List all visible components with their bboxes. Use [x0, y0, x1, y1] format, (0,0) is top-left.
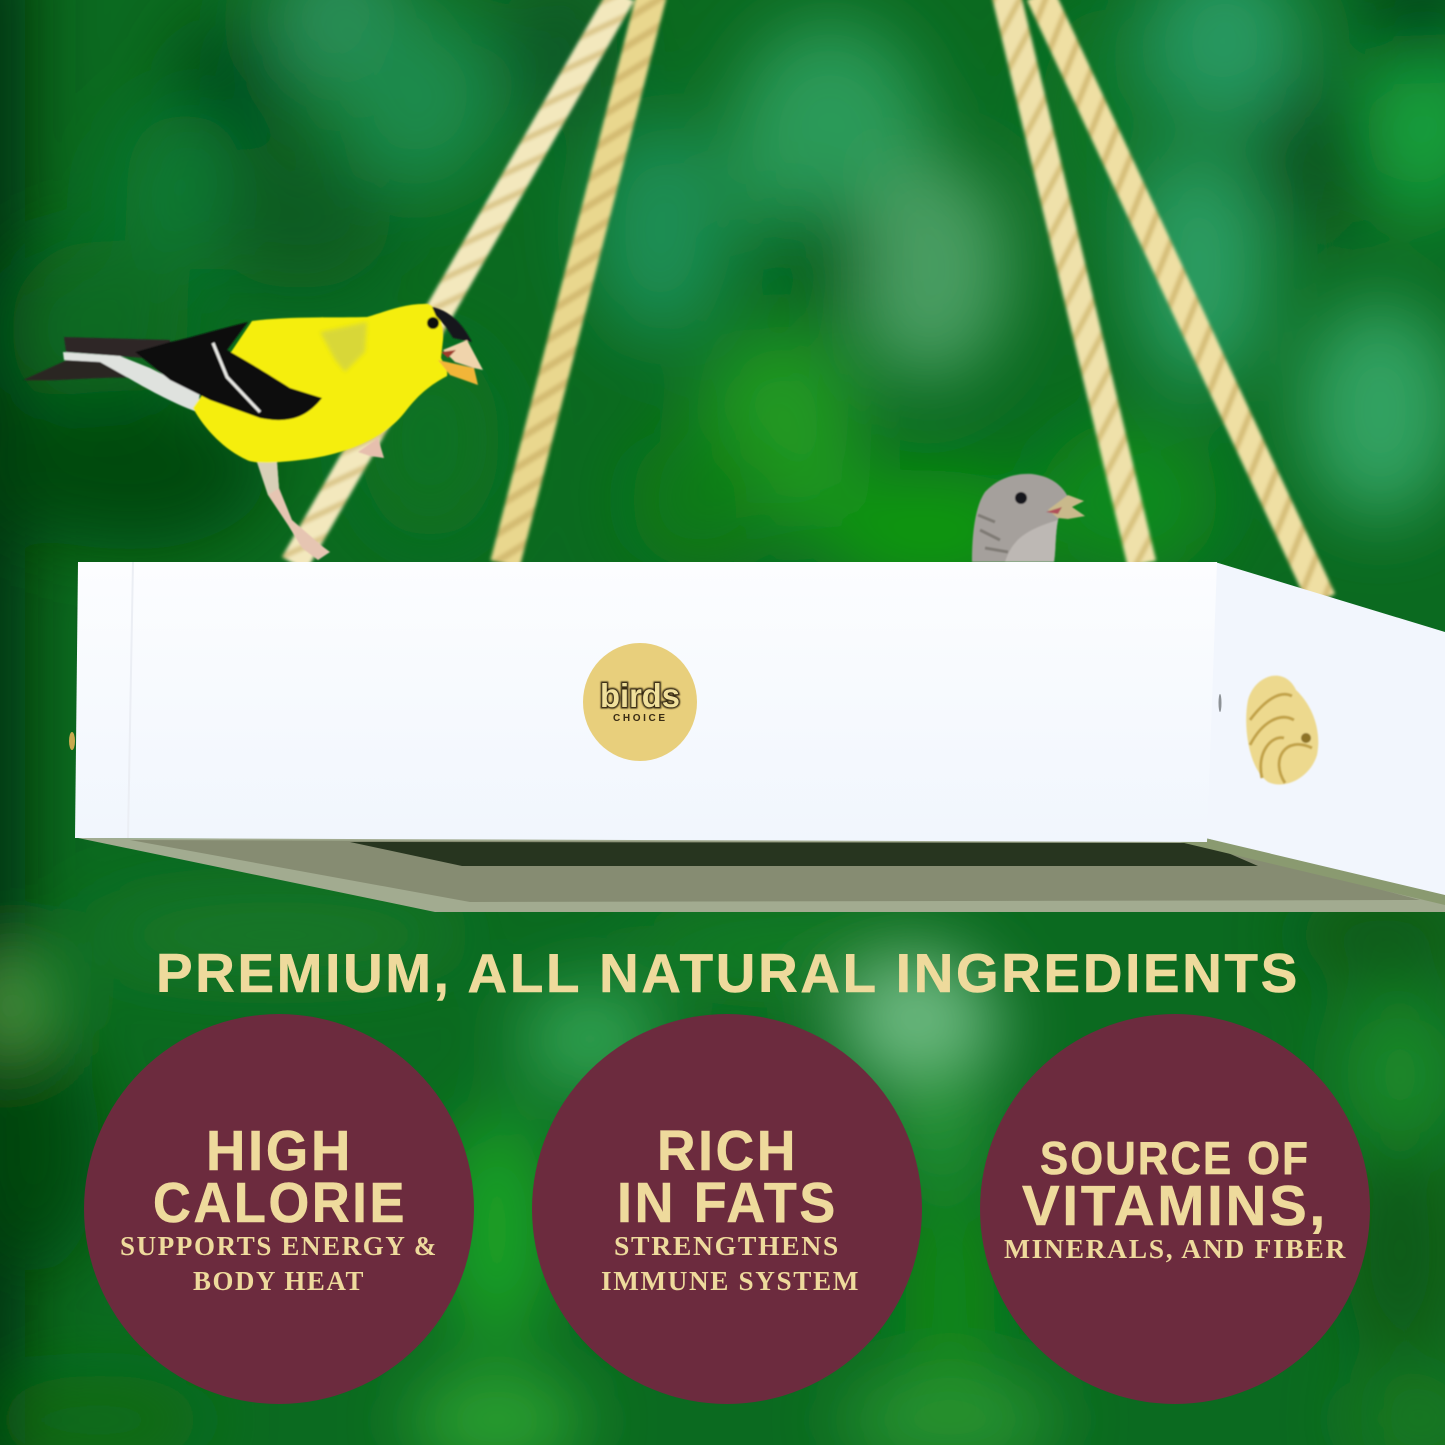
right face [1205, 562, 1445, 895]
birds choice badge: CHOICE [613, 713, 665, 724]
tail white edge [63, 352, 200, 412]
inner mesh [350, 842, 1258, 866]
eye [427, 317, 439, 329]
rope knot [1246, 676, 1318, 784]
birds choice badge: birds [600, 677, 680, 714]
lower beak [438, 360, 478, 385]
rope: far left [294, 0, 622, 564]
badge: source of vitamins [980, 1014, 1370, 1404]
cap [432, 307, 472, 342]
corner seam [128, 562, 133, 838]
rope: far right [1040, 0, 1322, 600]
body shade [320, 322, 367, 372]
badge: high calorie: CALORIE [153, 1171, 407, 1235]
badge: high calorie [84, 1014, 474, 1404]
badge: high calorie: BODY HEAT [193, 1266, 365, 1296]
front face [75, 562, 1217, 842]
badge: rich in fats [532, 1014, 922, 1404]
rope: inner right [1006, 0, 1142, 564]
badge: source of vitamins: SOURCE OF [1040, 1132, 1310, 1184]
ropes [294, 0, 1322, 600]
rope: inner left [505, 0, 652, 564]
heading: PREMIUM, ALL NATURAL INGREDIENTS [156, 942, 1300, 1004]
platform feeder [69, 562, 1445, 912]
badge: rich in fats: IN FATS [617, 1171, 838, 1235]
badge: source of vitamins: MINERALS, AND FIBER [1004, 1234, 1347, 1264]
upper beak [443, 340, 483, 370]
upper tail feathers [64, 337, 170, 360]
body [193, 304, 447, 463]
badge: rich in fats: IMMUNE SYSTEM [601, 1266, 860, 1296]
badge: high calorie: SUPPORTS ENERGY & [120, 1231, 438, 1261]
wing [135, 322, 322, 420]
birds choice badge: birds [600, 677, 680, 714]
badge: high calorie: HIGH [206, 1119, 353, 1183]
house finch [972, 474, 1085, 562]
wing bar [213, 343, 260, 412]
badge: rich in fats: STRENGTHENS [614, 1231, 840, 1261]
left rope nub [69, 732, 75, 750]
underside [78, 838, 1445, 912]
tail [23, 360, 135, 380]
screw [1218, 694, 1222, 712]
legs [257, 462, 330, 560]
underside inner panel [130, 840, 1420, 902]
badge: source of vitamins: VITAMINS, [1022, 1174, 1328, 1238]
badge: rich in fats: RICH [657, 1119, 798, 1183]
goldfinch [23, 304, 483, 560]
birds choice badge [583, 643, 697, 761]
right face rim [1180, 838, 1445, 905]
